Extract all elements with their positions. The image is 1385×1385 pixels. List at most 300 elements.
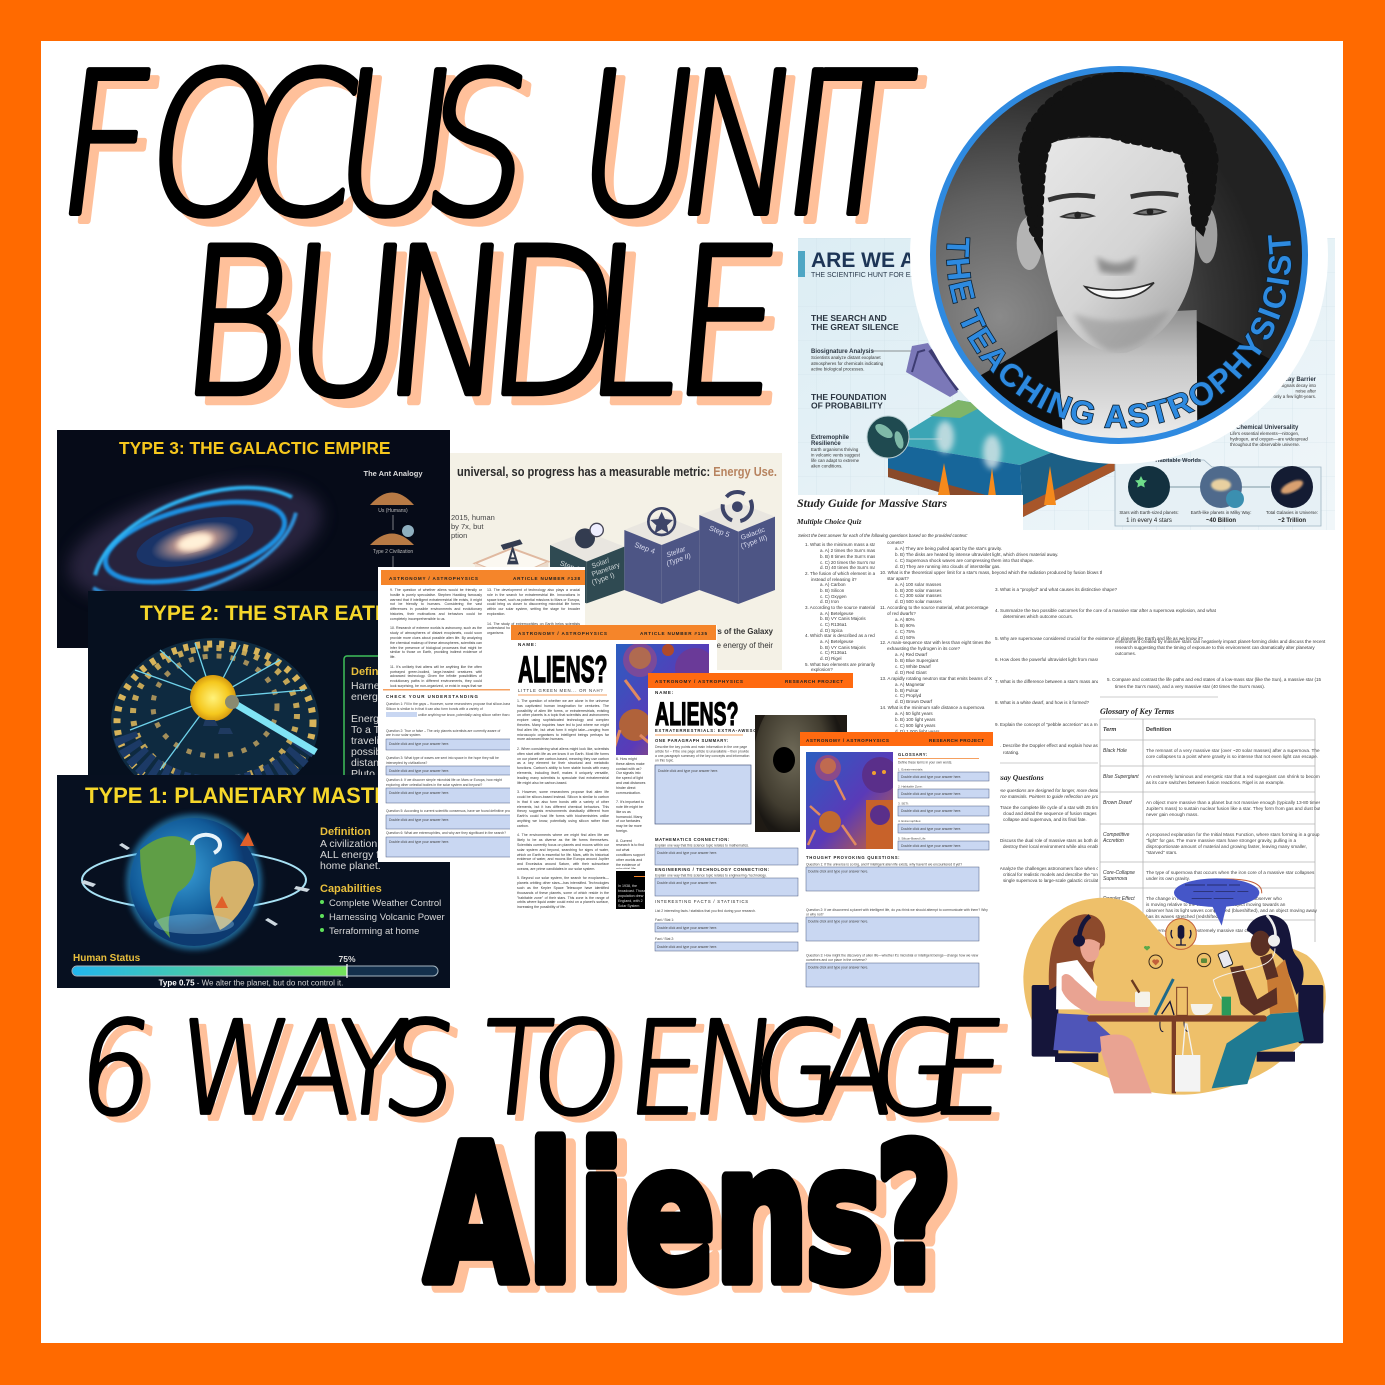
glossary table: observer has its light waves compressed (blueshifted), and an object moving away [1146, 908, 1318, 913]
quiz column 1: b. B) VY Canis Majoris [820, 616, 866, 621]
decay barrier note: noise after [1295, 388, 1317, 394]
glossary table: The type of supernova that occurs when the iron core of a massive star collapses [1146, 870, 1315, 875]
definition box: traveling [351, 735, 391, 747]
human status progress bar [72, 953, 438, 988]
glossary answer list [898, 752, 989, 850]
quiz column 2: 13. A rapidly rotating neutron star that emits beams of X [880, 676, 992, 681]
quiz heading: Multiple Choice Quiz [796, 517, 862, 526]
section: foundation of probability: OF PROBABILITY [811, 400, 883, 410]
glossary table: Definition [1146, 727, 1172, 733]
quiz instruction: Select the best answer for each of the following questions based on the provided context: [798, 533, 968, 538]
step 4 stellar [624, 508, 699, 604]
quiz column 1: d. D) 40 times the Sun's mass [820, 565, 881, 570]
quiz column 2: a. A) Magnetar [895, 682, 925, 687]
blue ring [933, 69, 1305, 441]
short answer questions [995, 587, 1217, 755]
ant analogy diagram [363, 469, 423, 570]
short answer questions: determines which outcome occurs. [1003, 614, 1073, 619]
glossary table: "fight" for gas. The more massive stars have stronger gravity, pulling in a [1146, 838, 1296, 843]
essay text upper right: outcomes. [1115, 651, 1136, 656]
short answer questions: 9. Explain the concept of "pebble accretion" as a model [995, 722, 1106, 727]
ant analogy diagram: Type 2 Civilization [373, 549, 413, 555]
quiz column 2: c. C) Proplyd [895, 693, 922, 698]
energy slide footer text: usable energy of their [698, 641, 773, 650]
definition text: ALL energy falling on [320, 849, 418, 861]
type 3 title: TYPE 3: THE GALACTIC EMPIRE [119, 438, 391, 458]
energy slide body text: 2015, human [451, 513, 495, 522]
essay questions section: 1. Trace the complete life cycle of a star with 25 times [995, 805, 1104, 810]
quiz column 2: b. B) Blue Supergiant [895, 658, 939, 663]
extremophile note: in volcanic vents suggest [811, 452, 861, 458]
habitable worlds statistics box: Habitable Worlds [1155, 458, 1201, 464]
quiz column 2: c. C) 75% [895, 629, 915, 634]
step 5 galactic: Step 5 [708, 523, 731, 539]
hair [1022, 75, 1215, 242]
check your understanding section: intercepted by civilizations? [386, 761, 427, 765]
icon: microphone badge [1166, 919, 1196, 949]
energy slide headline: universal, so progress has a measurable metric: Energy Use. [457, 464, 777, 479]
definition text: A civilization that [320, 838, 398, 850]
short answer questions: rotating. [1003, 750, 1019, 755]
decay barrier note: only a few light-years. [1274, 394, 1316, 399]
essay questions section: critical for realistic models and describe the "one [1003, 872, 1101, 877]
thought provoking questions: Question 3: How might the discovery of alien life—whether it's microbial or intelligent beings—change how we view [806, 954, 979, 958]
human status progress bar: Type 0.75 - We alter the planet, but do not control it. [159, 978, 343, 988]
quiz column 1: c. C) R136a1 [820, 622, 847, 627]
panel: research project page 1 [648, 673, 853, 960]
quiz column 1: c. C) Oxygen [820, 594, 847, 599]
infographic subtitle: THE SCIENTIFIC HUNT FOR EXTRATERRESTRIAL LIFE [811, 272, 994, 279]
decay barrier note [1274, 377, 1317, 399]
glossary answer list: Double click and type your answer here. [901, 827, 961, 831]
thought provoking questions: or why not? [806, 912, 824, 916]
engineering technology connection: Double click and type your answer here. [657, 881, 717, 885]
article 138 right column [487, 588, 580, 648]
shirt and neck [1057, 310, 1197, 447]
check your understanding section: Question 6: What are extremophiles, and why are they significant in the search? [386, 831, 506, 835]
human status progress bar: Human Status [73, 953, 141, 964]
page 2 header band: RESEARCH PROJECT [929, 738, 984, 743]
check your understanding section: Double click and type your answer here. [389, 769, 449, 773]
capabilities list: Harnessing Volcanic Power [329, 912, 445, 923]
interesting facts and statistics: Fact / Stat 2: [655, 937, 674, 941]
section: foundation of probability [811, 392, 886, 410]
glossary answer list: 4. Extremophiles: [898, 819, 921, 823]
definition box: Pluto [351, 768, 375, 780]
aliens subtitle: LITTLE GREEN MEN... OR NAH? [518, 688, 603, 693]
thought provoking questions [806, 855, 988, 987]
quiz column 2: b. B) The disks are heated by intense ultraviolet light, which drives material away. [895, 552, 1058, 557]
energy slide footer text: Masters of the Galaxy [692, 627, 774, 636]
quiz column 1: a. A) Carbon [820, 582, 846, 587]
essay questions section: 2. Discuss the dual role of massive stars as both destroyers [995, 838, 1116, 843]
panel: type 1 planetary master slide [57, 775, 450, 988]
quiz column 2: d. D) Red Giant [895, 670, 927, 675]
step 3 solar planetary: (Type I) [591, 572, 616, 587]
quiz column 1: a. A) 2 times the Sun's mass [820, 548, 878, 553]
article 135 header band: ARTICLE NUMBER #135 [640, 631, 707, 636]
panel: massive stars study guide [796, 495, 1337, 950]
definition box: distances [351, 757, 395, 769]
photo badge: the teaching astrophysicist [910, 66, 1328, 464]
biosignature analysis note: atmospheres for chemicals indicating [811, 361, 884, 366]
speech bubble [1174, 878, 1262, 926]
quiz column 1: d. D) Rigel [820, 656, 841, 661]
panel: article 135 reading page [510, 625, 717, 911]
quiz column 1: d. D) Spica [820, 628, 843, 633]
decay barrier note: Decay Barrier [1277, 377, 1317, 383]
check your understanding section: CHECK YOUR UNDERSTANDING [386, 694, 479, 699]
essay questions section: 3. Analyze the challenges astronomers face when creating [995, 866, 1113, 871]
page 2 header band [800, 732, 993, 746]
stat: stars: 1 in every 4 stars [1126, 518, 1172, 524]
research page header band [648, 673, 853, 688]
quiz column 2: d. D) 50% [895, 635, 915, 640]
biosignature analysis note [811, 349, 930, 372]
thought provoking questions: Double click and type your answer here. [808, 870, 868, 874]
chemical universality note: Chemical Universality [1236, 425, 1299, 431]
section: foundation of probability: THE FOUNDATION [811, 392, 886, 402]
title: focus unit: FOCUS UNIT [46, 32, 924, 260]
heading: aliens?: Aliens? [425, 1106, 952, 1325]
panel: article 138 worksheet page [378, 567, 586, 862]
panel: type 3 galactic empire slide [56, 430, 450, 648]
stat: galaxies: Total Galaxies in Universe: [1266, 510, 1318, 515]
ant analogy diagram: The Ant Analogy [363, 469, 423, 478]
step 4 stellar: (Type II) [666, 553, 692, 568]
quiz column 2: 10. What is the theoretical upper limit for a star's mass, beyond which the radiation produced by fusion blows the [880, 570, 1107, 575]
definition box: Energy [351, 713, 385, 725]
short answer questions: 5. Why are supernovae considered crucial for the existence of planets like Earth and life as we know it? [995, 636, 1203, 641]
article 138 left column [390, 588, 482, 688]
step 3 solar planetary [550, 523, 624, 603]
glossary answer list: 5. Silicon-Based Life: [898, 836, 926, 840]
capabilities list: Complete Weather Control [329, 898, 441, 909]
chemical universality note [1230, 425, 1308, 447]
eyes [1062, 208, 1165, 218]
hanging white bag [1175, 1023, 1200, 1092]
short answer questions: 7. What is the difference between a star's mass and its luminosity [995, 679, 1127, 684]
quiz column 2: b. B) 90% [895, 623, 915, 628]
section: search and silence: THE GREAT SILENCE [811, 322, 899, 332]
capabilities list: Terraforming at home [329, 926, 419, 937]
step 4 stellar: Step 4 [633, 540, 656, 556]
glossary answer list: Double click and type your answer here. [901, 792, 961, 796]
black fun fact box: Solar System [618, 904, 639, 908]
interesting facts and statistics [655, 899, 798, 951]
yellow blob background [1023, 898, 1326, 1095]
short answer questions: 10. Describe the Doppler effect and explain how astronomers [995, 743, 1119, 748]
engineering technology connection: ENGINEERING / TECHNOLOGY CONNECTION: [655, 867, 770, 872]
human status progress bar: 75% [338, 954, 356, 964]
definition box: To a Type [351, 724, 396, 736]
quiz column 2: b. B) 200 solar masses [895, 588, 942, 593]
essay questions section: collapse and supernova, and its final fate. [1003, 817, 1087, 822]
interesting facts and statistics: INTERESTING FACTS / STATISTICS [655, 899, 749, 904]
name field: NAME: [518, 642, 537, 647]
definition text: home planet. [320, 860, 381, 872]
curved badge text: THE TEACHING ASTROPHYSICIST [946, 234, 1292, 428]
one paragraph summary section: a one-paragraph summary of the key concepts and information [655, 754, 750, 758]
engineering technology connection [655, 867, 798, 896]
thought provoking questions: Question 1: If the universe is so big, and if intelligent alien life exists, why haven't we encountered it yet? [806, 862, 962, 866]
check your understanding section: Double click and type your answer here. [389, 742, 449, 746]
orange rule [518, 694, 607, 696]
glossary answer list: Double click and type your answer here. [901, 844, 961, 848]
woman on left with headphones [1049, 914, 1152, 1093]
quiz column 1: a. A) Betelgeuse [820, 639, 854, 644]
definition text: Definition [320, 826, 371, 838]
quiz column 2: b. B) 100 light years [895, 717, 936, 722]
biosignature analysis note: active biological processes. [811, 366, 864, 372]
stat: earth-like planets: Earth-like planets in Milky Way: [1191, 510, 1251, 515]
type 2 title: TYPE 2: THE STAR EATER [140, 602, 404, 625]
check your understanding section: exploring other celestial bodies in the solar system and beyond? [386, 783, 482, 787]
essay questions section: These questions are designed for longer, more detailed [993, 788, 1105, 793]
one paragraph summary section [655, 738, 751, 824]
step 3 solar planetary: Solar/ [591, 557, 611, 570]
section: search and silence: THE SEARCH AND [811, 313, 887, 323]
icon: heart badge [1149, 955, 1162, 968]
thought provoking questions: Double click and type your answer here. [808, 966, 868, 970]
essay questions section: source materials. Pointers to guide reflection are provided [993, 794, 1110, 799]
check your understanding section: Double click and type your answer here. [389, 818, 449, 822]
article 138 left column: 9. The question of whether aliens would be friendly or hostile is purely speculative. Stephen Hawking famously warned that if intelligent extraterrestrial life exists, it might not be friendly to humans. Considering the vast differences in possible environments and evolutionary histories, their motivations and behaviors could be completely incomprehensible to us. [390, 588, 482, 621]
quiz column 1: b. B) VY Canis Majoris [820, 645, 866, 650]
alien portrait photo [755, 715, 847, 832]
glossary table: An object more massive than a planet but not massive enough (typically 13-80 times [1146, 800, 1321, 805]
icon: thumbs up badge [1197, 953, 1211, 967]
illustration: purple aliens art [616, 644, 709, 755]
quiz column 2: d. D) Brown Dwarf [895, 699, 933, 704]
glossary table: A proposed explanation for the Initial Mass Function, where stars forming in a group [1146, 832, 1320, 837]
aliens worksheet heading: ALIENS? [655, 696, 738, 732]
short answer questions: 4. Summarize the two possible outcomes for the core of a massive star after a supernova explosion, and what [995, 608, 1217, 613]
woman on right with phone [1212, 915, 1304, 1088]
interesting facts and statistics: Double click and type your answer here. [657, 945, 717, 949]
energy slide body text [451, 513, 495, 540]
quiz column 1: b. B) Silicon [820, 588, 845, 593]
extremophile note [811, 435, 861, 468]
title: bundle: BUNDLE [173, 205, 790, 441]
definition box: energy [351, 691, 384, 703]
definition text [320, 827, 380, 871]
ocean crust cutaway block [888, 400, 1116, 517]
check your understanding section: Question 2: True or false – The only planets scientists are currently aware of [386, 729, 500, 733]
capabilities list: Capabilities [320, 883, 382, 895]
article 135 right column: 7. It's important to note life might be like us as humanoid. Many of our fantasies may be far more foreign. [616, 800, 644, 833]
black fun fact box: In 1938, the [618, 884, 637, 888]
glossary answer list: 2. Habitable Zone: [898, 784, 923, 788]
panel: type 2 star eater slide [88, 591, 378, 775]
quiz column 1: a. A) Betelgeuse [820, 611, 854, 616]
eyebrows [1048, 193, 1178, 200]
chemical universality note: throughout the observable universe. [1230, 442, 1300, 447]
glossary table: Accretion [1102, 838, 1124, 844]
check your understanding section: are in our solar system. [386, 733, 421, 737]
check your understanding section: Question 3: What type of waves are sent into space in the hope they will be [386, 756, 499, 760]
infographic accent bar [798, 251, 805, 277]
stubble shading [1073, 310, 1170, 350]
thought provoking questions: Double click and type your answer here. [808, 920, 868, 924]
glossary answer list: GLOSSARY: [898, 752, 928, 757]
chemical universality note: Life's essential elements—nitrogen, [1230, 431, 1299, 436]
glossary table: Competitive [1103, 832, 1130, 838]
glossary table: Black Hole [1103, 748, 1127, 754]
quiz column 1: 2. The fusion of which element in a star consumes [805, 571, 907, 576]
glossary answer list: 1. Extraterrestrials: [898, 768, 923, 772]
quiz column 2: c. C) Supernova shock waves are compressing them into that shape. [895, 558, 1034, 563]
definition box: Harness [351, 680, 390, 692]
infographic title: ARE WE ALONE? [811, 249, 986, 272]
article 135 header band: ASTRONOMY / ASTROPHYSICS [518, 631, 607, 636]
glossary table: as its core switches between fusion reactions. Rigel is an example. [1146, 780, 1285, 785]
glossary table: The remnant of a very massive star (over ~20 solar masses) after a supernova. The [1146, 748, 1320, 753]
article 135 left column: 4. The environments where we might find alien life are likely to be as diverse as the life forms themselves. Scientists currently focus on planets and moons within our solar system and beyond, searching for signs of water, which on Earth is essential for life. Mars, with its historical evidence of water, and moons like Europa around Jupiter and Enceladus around Saturn, with their subsurface oceans, are prime candidates in our solar system. [517, 833, 609, 871]
essay text upper right: times the Sun's mass), and a very massive star (40 times the Sun's mass). [1115, 684, 1265, 689]
step 4 stellar: Stellar [666, 546, 687, 559]
quiz column 2: comets? [887, 540, 905, 545]
quiz column 2: d. D) They are running into clouds of interstellar gas. [895, 564, 1001, 569]
extremophile note: Resilience [811, 441, 841, 447]
face [1040, 138, 1195, 353]
glossary answer list: Double click and type your answer here. [901, 775, 961, 779]
study guide title: Study Guide for Massive Stars [797, 496, 947, 510]
quiz column 2: a. A) 80% [895, 617, 915, 622]
quiz column 1: instead of releasing it? [811, 577, 857, 582]
essay questions section: single supernova to large-scale galactic circulation [1003, 878, 1105, 883]
glossary table: has its waves stretched (redshifted). [1146, 914, 1221, 919]
smile [1085, 283, 1154, 298]
glossary table [1100, 719, 1323, 942]
article 135 right column: 6. How might these aliens make contact with us? Our signals into the speed of light and vast distances hinder direct communication. [616, 757, 645, 795]
check your understanding section: Silicon is similar to in that it can also form bonds with a variety of [386, 707, 483, 711]
glossary table: under its own gravity. [1146, 876, 1190, 881]
thought provoking questions: Question 2: If we discovered a planet with intelligent life, do you think we should attempt to communicate with them? Why [806, 908, 988, 912]
article 138 left column: 10. Research of extreme worlds is astronomy, such as the study of atmospheres of distant exoplanets, could soon provide more clues about possible alien life. By analyzing the chemical makeup of these atmospheres, scientists can infer the presence of biological processes that might be similar to those on Earth, providing indirect evidence of life. [390, 626, 482, 659]
stat: stars: Stars with Earth-sized planets: [1119, 510, 1179, 515]
quiz column 1: d. D) Iron [820, 599, 839, 604]
one paragraph summary section: on this topic. [655, 758, 674, 762]
quiz column 1: b. B) 8 times the Sun's mass [820, 554, 878, 559]
quiz column 2: a. A) Red Dwarf [895, 652, 928, 657]
definition box: Definition [351, 666, 402, 678]
glossary answer list: Define these terms in your own words. [898, 760, 952, 764]
quiz column 1: c. C) R136a1 [820, 650, 847, 655]
portrait photo [930, 67, 1310, 447]
check your understanding section: Double click and type your answer here. [389, 791, 449, 795]
glossary table: Brown Dwarf [1103, 800, 1132, 806]
mathematics connection: MATHEMATICS CONNECTION: [655, 837, 730, 842]
cafe table with items [1087, 979, 1267, 1093]
one paragraph summary section: Describe the key points and main information in the one page [655, 745, 747, 749]
black fun fact box [616, 871, 646, 909]
glossary table: "starved" stars. [1146, 850, 1177, 855]
glossary table: Jupiter's mass) to sustain nuclear fusion like a star. They form from gas and dust but [1146, 806, 1321, 811]
quiz column 2: c. C) 500 light years [895, 723, 936, 728]
glossary table: An extremely luminous and energetic star that a red supergiant can shrink to become [1146, 774, 1323, 779]
short answer questions: 8. What is a white dwarf, and how is it formed? [995, 700, 1089, 705]
thought provoking questions: ourselves and our place in the universe? [806, 958, 867, 962]
quiz column 2: 14. What is the minimum safe distance a supernova [880, 705, 985, 710]
quiz column 2: star apart? [887, 576, 909, 581]
engineering technology connection: Explain one way that this science topic relates to engineering / technology. [655, 874, 767, 878]
article 138 header band: ARTICLE NUMBER #138 [513, 576, 580, 581]
glossary heading: Glossary of Key Terms [1100, 707, 1174, 716]
check your understanding section [383, 689, 586, 857]
aliens worksheet heading: ALIENS? [518, 650, 607, 691]
essay questions section: cloud and detail the sequence of fusion stages it undergoes [1003, 811, 1124, 816]
illustration: two women listening to a podcast [1023, 878, 1326, 1095]
short answer questions: 6. How does the powerful ultraviolet light from massive stars [995, 657, 1117, 662]
definition box [343, 655, 378, 775]
energy slide body text: by 7x, but [451, 522, 484, 531]
energy slide footer text [717, 628, 773, 650]
mathematics connection: Explain one way that this science topic relates to mathematics. [655, 844, 749, 848]
quiz column 1 [805, 542, 875, 672]
extremophile note: alien conditions. [811, 464, 842, 468]
glossary table: Blue Supergiant [1103, 774, 1139, 780]
essay questions section [1000, 762, 1098, 883]
quiz column 2: a. A) 100 solar masses [895, 582, 942, 587]
chairs [1032, 985, 1323, 1062]
one paragraph summary section: Double click and type your answer here. [658, 769, 718, 773]
check your understanding section: Question 5: According to current scientific consensus, have we found definitive proof [386, 809, 513, 813]
glossary table: Doppler Effect [1103, 896, 1135, 902]
quiz column 1: 5. What two elements are primarily responsible [805, 662, 900, 667]
quiz column 2: of red dwarfs? [887, 611, 916, 616]
check your understanding section: Question 4: If we discover simple microbial life on Mars or Europa, how might [386, 778, 502, 782]
short answer questions: 3. What is a "proplyd" and what causes its distinctive shape? [995, 587, 1117, 592]
step 5 galactic: Galactic [740, 526, 767, 542]
habitable worlds statistics box [1115, 458, 1321, 526]
glossary table: The change in frequency of a wave in relation to an observer who [1146, 896, 1282, 901]
extremophile note: life can adapt to extreme [811, 458, 860, 463]
illustration: purple alien creatures [806, 752, 898, 849]
decay barrier note: signals decay into [1281, 383, 1317, 388]
check your understanding section: Question 1: Fill in the gaps – However, some researchers propose that silicon-based [386, 702, 513, 706]
illustration: dyson swarm around sun [111, 638, 319, 775]
step 3 solar planetary: Step 3 [559, 558, 582, 574]
subtitle: EXTRATERRESTRIALS: EXTRA-AWESOME [655, 728, 765, 733]
quiz column 1: explosion? [811, 667, 833, 672]
quiz column 2: c. C) White Dwarf [895, 664, 931, 669]
page 2 header band: ASTRONOMY / ASTROPHYSICS [806, 738, 889, 743]
quiz column 2: c. C) 300 solar masses [895, 593, 942, 598]
research page header band: RESEARCH PROJECT [785, 679, 843, 684]
energy slide body text: ption [451, 531, 467, 540]
article 138 header band: ASTRONOMY / ASTROPHYSICS [389, 576, 478, 581]
essay questions section: Essay Questions [992, 773, 1044, 782]
step 5 galactic [699, 492, 775, 604]
quiz column 1: 4. Which star is described as a red supergiant [805, 633, 898, 638]
capabilities list [320, 883, 445, 937]
illustration: earth with ring [81, 814, 310, 950]
stat: earth-like planets [1191, 466, 1251, 524]
type 1 title: TYPE 1: PLANETARY MASTER [85, 783, 405, 808]
extremophile note: Earth organisms thriving [811, 447, 859, 452]
panel: research project page 2 [800, 732, 1000, 990]
mathematics connection: Double click and type your answer here. [657, 851, 717, 855]
nose and cheek shading [1097, 257, 1137, 274]
name field: NAME: [655, 690, 674, 695]
quiz column 2: exhausting the hydrogen in its core? [887, 646, 961, 651]
section: search and silence [811, 313, 899, 332]
biosignature analysis note: Biosignature Analysis [811, 349, 874, 355]
ears [1017, 207, 1217, 270]
article 135 left column [517, 699, 609, 911]
interesting facts and statistics: Fact / Stat 1: [655, 918, 674, 922]
